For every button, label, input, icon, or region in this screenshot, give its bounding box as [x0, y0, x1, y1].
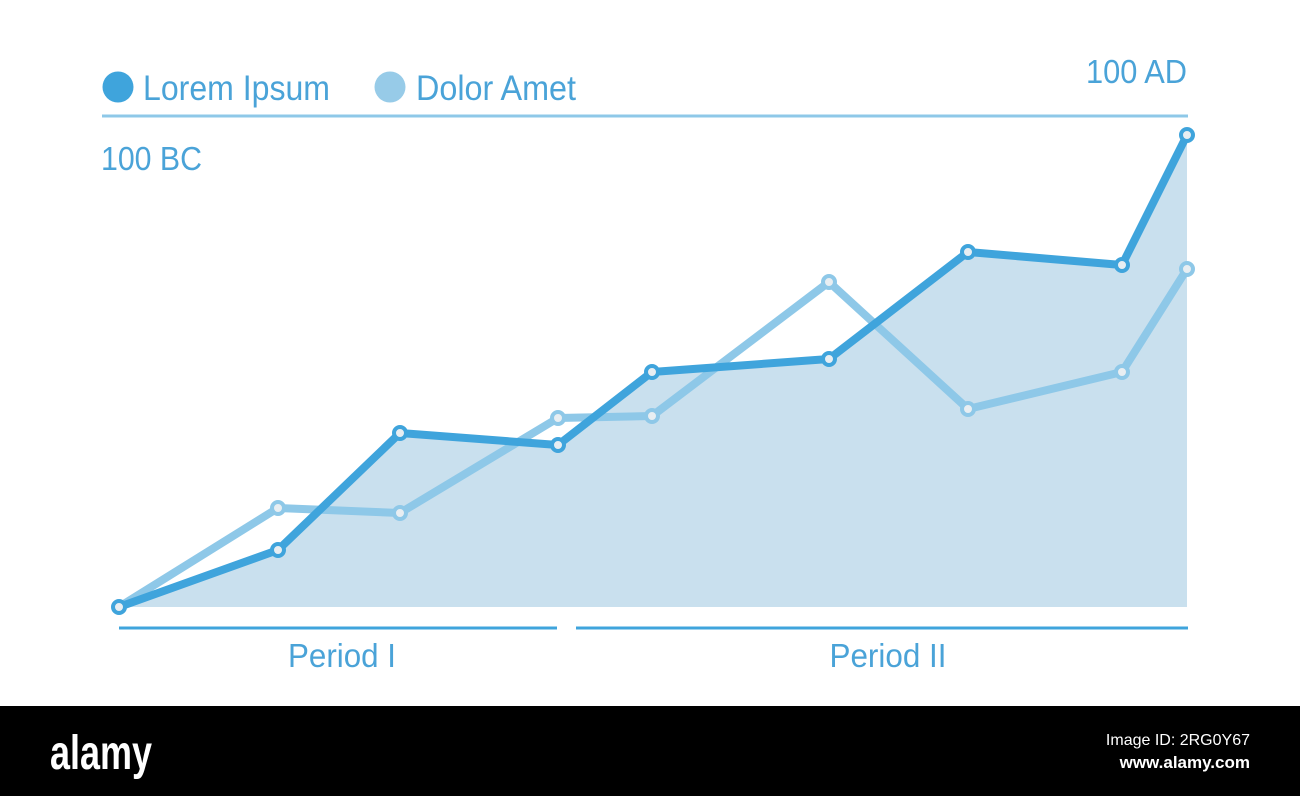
legend: lorem ipsum: Lorem Ipsum: [143, 69, 330, 108]
legend: dolor amet: Dolor Amet: [416, 69, 576, 108]
series: dolor amet line: [119, 263, 1193, 607]
area fill: [119, 135, 1187, 607]
legend: [102, 69, 576, 108]
footer band: www.alamy.com: [1119, 753, 1250, 772]
label: 100 AD: 100 AD: [1086, 53, 1187, 90]
series: lorem ipsum line: [113, 129, 1193, 613]
label: 100 BC: 100 BC: [101, 140, 202, 177]
period I axis: Period I: [288, 637, 396, 674]
period II axis: Period II: [830, 637, 946, 674]
footer band: [0, 706, 1300, 796]
footer band: Image ID: 2RG0Y67: [1106, 732, 1250, 749]
footer band: alamy: [50, 727, 152, 780]
